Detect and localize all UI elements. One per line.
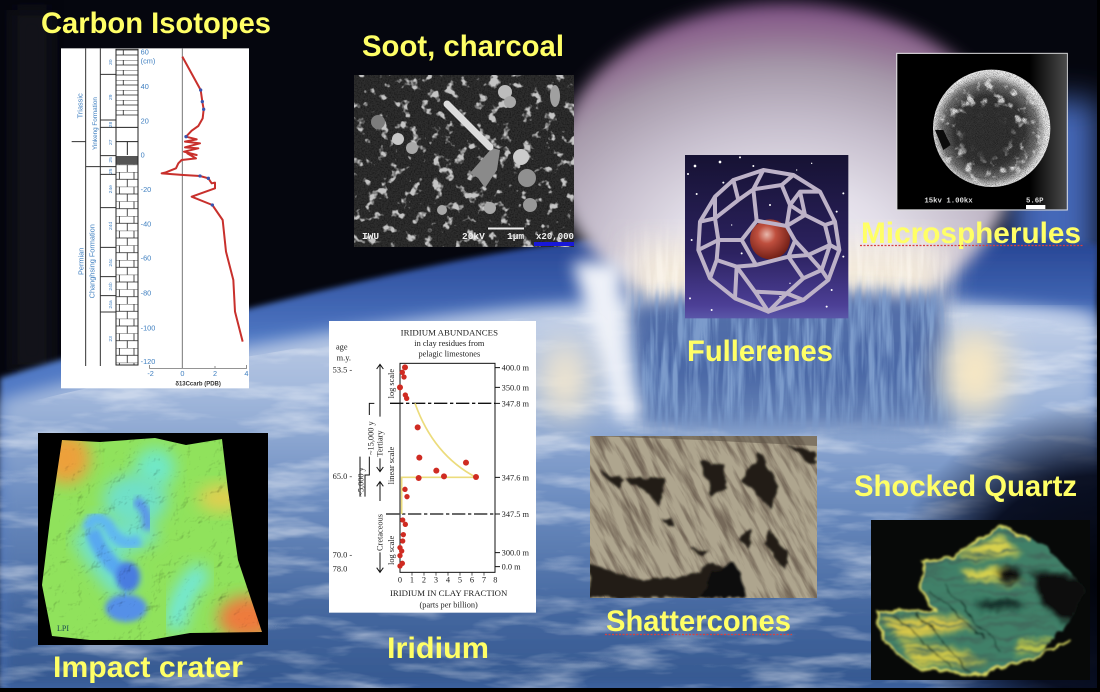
- stratigraphic labels: 40: [141, 82, 149, 91]
- stratigraphic labels: (cm): [141, 56, 155, 65]
- rod crystal: [447, 104, 490, 147]
- x axis labels: [147, 369, 248, 388]
- panel: microspherule micrograph: 5.6P: [1026, 198, 1044, 206]
- side text: [356, 369, 396, 565]
- stratigraphic labels: 30: [108, 59, 114, 65]
- chart title: in clay residues from: [414, 339, 485, 348]
- chart title: [401, 329, 498, 359]
- right axis labels: 347.6 m: [502, 473, 529, 482]
- scale text: 20kV: [462, 231, 485, 242]
- stratigraphic labels: -120: [141, 357, 155, 366]
- right axis labels: [502, 364, 529, 572]
- side text: log scale: [387, 369, 396, 398]
- side text: ~5,000 y: [356, 466, 365, 497]
- age labels: age: [336, 342, 348, 351]
- stratigraphic labels: 60: [141, 48, 149, 57]
- x axis labels: 5: [458, 576, 462, 585]
- red ball: [750, 219, 790, 259]
- stratigraphic labels: Triassic: [76, 93, 85, 118]
- right axis labels: 347.8 m: [502, 399, 529, 408]
- stratigraphic labels: 23: [108, 336, 114, 342]
- scale text: [362, 228, 574, 246]
- panel: shattercones rock photo: [590, 436, 817, 598]
- side text: ~15,000 y: [366, 421, 375, 455]
- stratigraphic labels: 27: [108, 139, 114, 145]
- scale text: 15kv 1.00kx: [924, 198, 973, 206]
- title: Microspherules: Microspherules: [861, 217, 1081, 250]
- x axis labels: -2: [147, 369, 154, 378]
- age labels: 78.0: [333, 565, 347, 574]
- scale arrows and brackets: [360, 364, 383, 572]
- right axis labels: 350.0 m: [502, 383, 529, 392]
- x axis labels: (parts per billion): [420, 600, 478, 609]
- title: Iridium: Iridium: [387, 632, 489, 665]
- stratigraphic labels: Changhsing Formation: [88, 224, 97, 298]
- scale text: 1μm: [507, 231, 524, 242]
- stratigraphic labels: -100: [141, 324, 155, 333]
- stratigraphic labels: 25: [108, 168, 114, 174]
- right axis labels: 400.0 m: [502, 364, 529, 373]
- iridium data points: [397, 364, 479, 569]
- stratigraphic labels: 24b: [108, 282, 114, 291]
- panel: fullerene molecule: [685, 155, 848, 318]
- right axis labels: 300.0 m: [502, 549, 529, 558]
- stratigraphic labels: 28: [108, 122, 114, 127]
- x axis labels: [390, 576, 507, 609]
- stratigraphic labels: 24e: [108, 185, 114, 193]
- panel: microspherule micrograph: [897, 53, 1067, 210]
- age labels: 53.5 -: [333, 366, 352, 375]
- x axis labels: 4: [244, 369, 248, 378]
- x axis labels: 2: [213, 369, 217, 378]
- x axis labels: 1: [410, 576, 414, 585]
- LPI mark: LPI: [57, 624, 69, 633]
- x axis labels: 3: [434, 576, 438, 585]
- age labels: 70.0 -: [333, 550, 352, 559]
- side text: linear scale: [387, 446, 396, 484]
- title: Shattercones: Shattercones: [606, 605, 791, 638]
- right axis labels: 347.5 m: [502, 510, 529, 519]
- scale text: x20,000: [536, 231, 574, 242]
- panel: soot, charcoal micrograph: [354, 75, 574, 247]
- shadow patches: [590, 445, 815, 598]
- stratigraphic labels: Yinkeng Formation: [92, 97, 99, 150]
- age labels: 65.0 -: [333, 472, 352, 481]
- x axis labels: 4: [446, 576, 451, 585]
- yellow fit lines: [402, 403, 476, 514]
- stratigraphic labels: Permian: [76, 248, 85, 275]
- stratigraphic labels: 25: [108, 157, 114, 163]
- panel: impact crater topography: [38, 432, 278, 645]
- chart title: IRIDIUM ABUNDANCES: [401, 329, 498, 338]
- x axis labels: 8: [493, 576, 497, 585]
- x axis labels: 6: [470, 576, 474, 585]
- side text: Tertiary: [376, 430, 385, 457]
- side text: log scale: [387, 535, 396, 565]
- title: Soot, charcoal: Soot, charcoal: [362, 30, 564, 63]
- soot particles: [371, 85, 560, 215]
- age labels: [333, 342, 352, 574]
- stratigraphic labels: 24c: [108, 258, 114, 267]
- terrain surface: [42, 438, 262, 640]
- x axis labels: 7: [482, 576, 486, 585]
- stratigraphic columns: [72, 48, 138, 366]
- stratigraphic labels: [76, 48, 155, 366]
- panel: carbon isotopes chart: [61, 48, 249, 388]
- stratigraphic labels: 0: [141, 150, 145, 159]
- right axis labels: 0.0 m: [502, 563, 521, 572]
- scale text: IWU: [362, 231, 379, 242]
- x axis labels: 0: [180, 369, 184, 378]
- title: Fullerenes: Fullerenes: [687, 335, 833, 368]
- title: Carbon Isotopes: Carbon Isotopes: [41, 7, 271, 40]
- cage struts: [698, 170, 839, 312]
- stratigraphic labels: -40: [141, 220, 151, 229]
- age labels: m.y.: [337, 354, 351, 363]
- quartz grain: [871, 520, 1090, 680]
- title: Shocked Quartz: Shocked Quartz: [854, 470, 1077, 503]
- panel: shocked quartz micrograph: [871, 520, 1090, 680]
- title: Impact crater: Impact crater: [53, 651, 243, 684]
- plot frame and dashed boundaries: [386, 363, 500, 576]
- stratigraphic labels: -20: [141, 185, 151, 194]
- x axis labels: 0: [398, 576, 402, 585]
- stratigraphic labels: 24a: [108, 300, 114, 309]
- chart title: pelagic limestones: [418, 350, 480, 359]
- x axis labels: IRIDIUM IN CLAY FRACTION: [390, 589, 507, 598]
- sphere: [933, 70, 1050, 187]
- panel: iridium abundance chart: [329, 321, 536, 613]
- side text: Cretaceous: [376, 514, 385, 551]
- x axis labels: δ13Ccarb (PDB): [175, 382, 221, 388]
- stratigraphic labels: -60: [141, 254, 151, 263]
- carbon isotope curve: [149, 48, 247, 368]
- stratigraphic labels: -80: [141, 289, 151, 298]
- stratigraphic labels: 24d: [108, 221, 114, 230]
- stratigraphic labels: 20: [141, 116, 149, 125]
- stratigraphic labels: 29: [108, 94, 114, 100]
- x axis labels: 2: [422, 576, 426, 585]
- stars: [687, 156, 844, 311]
